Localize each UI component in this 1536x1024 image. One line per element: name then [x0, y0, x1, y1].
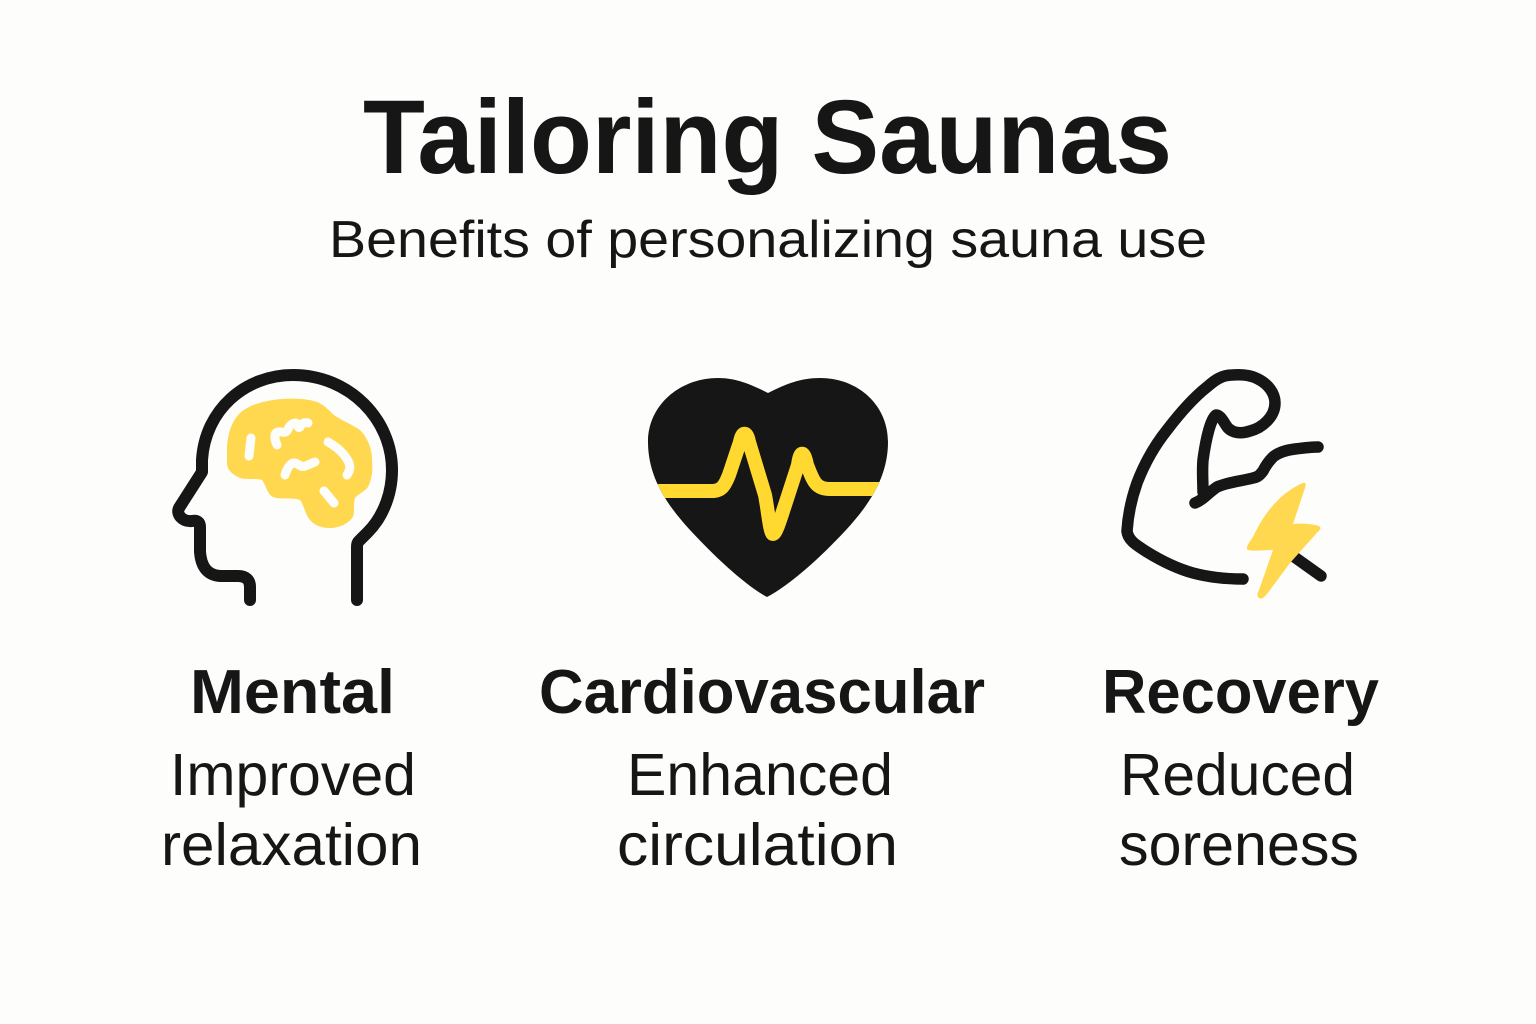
panel: cardiovascular — [539, 378, 985, 878]
heading: cardiovascular: Cardiovascular — [539, 658, 985, 727]
text: enhanced circulation — [617, 742, 898, 878]
text: enhanced circulation: circulation — [617, 812, 898, 878]
icon: flexed arm with lightning bolt — [1127, 375, 1321, 599]
panel: mental — [161, 375, 422, 878]
lightning bolt — [1247, 483, 1321, 599]
icon: heart with pulse — [640, 378, 895, 597]
head outline — [178, 375, 392, 600]
arm outline — [1127, 375, 1275, 579]
tail stroke — [1293, 556, 1321, 576]
title: Tailoring Saunas — [363, 79, 1172, 196]
text: enhanced circulation: Enhanced — [627, 742, 893, 808]
heading: mental: Mental — [190, 658, 395, 727]
text: improved relaxation: Improved — [170, 742, 416, 808]
icon: head with brain — [178, 375, 392, 600]
text: reduced soreness: Reduced — [1120, 742, 1355, 808]
heading: recovery: Recovery — [1102, 658, 1380, 727]
forearm crease — [1195, 447, 1318, 503]
text: improved relaxation: relaxation — [161, 812, 422, 878]
heart shape — [648, 378, 888, 597]
text: reduced soreness: soreness — [1119, 812, 1359, 878]
pulse line — [640, 434, 895, 534]
subtitle: Benefits of personalizing sauna use — [329, 211, 1207, 269]
brain shape — [227, 399, 372, 528]
text: improved relaxation — [161, 742, 422, 878]
text: reduced soreness — [1119, 742, 1359, 878]
brain folds — [249, 423, 350, 503]
panel: recovery — [1102, 375, 1380, 878]
